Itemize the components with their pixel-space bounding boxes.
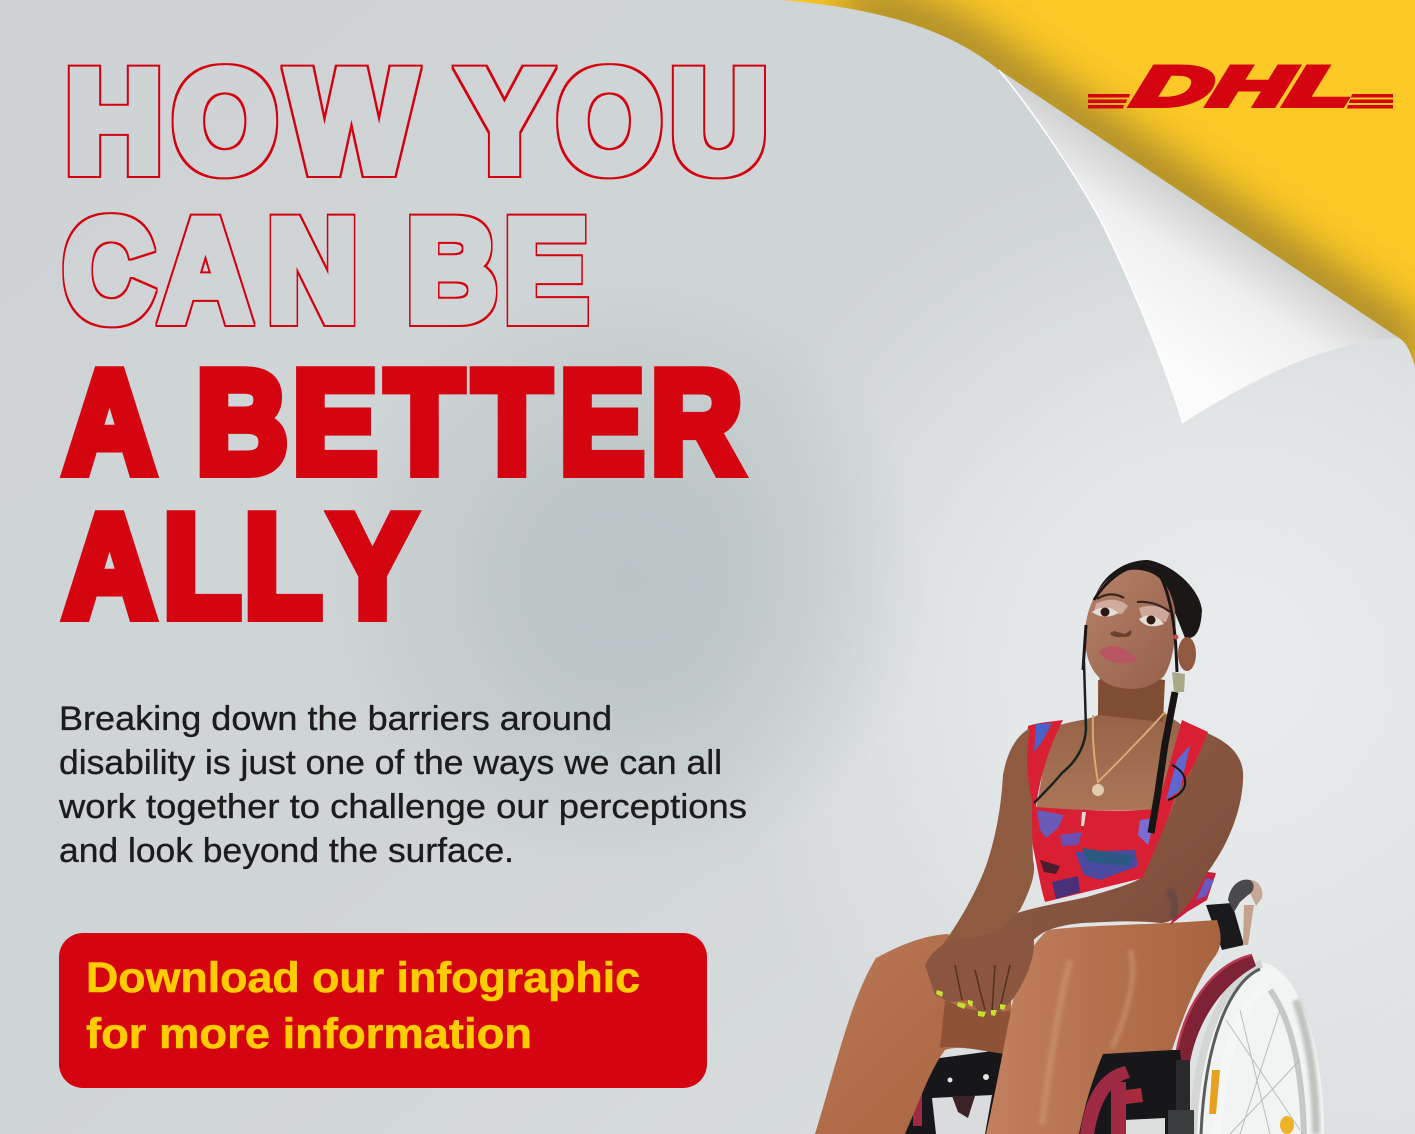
ear	[1178, 637, 1196, 671]
page curl with yellow corner	[780, 0, 1415, 423]
nose	[1110, 630, 1132, 637]
right arm	[958, 733, 1243, 990]
braids	[1083, 562, 1177, 672]
heading solid line 3: A BETTER	[64, 341, 742, 503]
folded flap	[999, 70, 1399, 423]
elbow shadow	[1168, 890, 1175, 918]
top lower right piece	[1170, 870, 1216, 925]
wheelchair	[904, 880, 1324, 1134]
hair back	[1094, 560, 1202, 638]
head	[1034, 560, 1202, 833]
shadow on yellow	[840, 3, 1415, 367]
under seat frame	[904, 1050, 1190, 1134]
necklace	[1093, 712, 1165, 782]
neck	[1098, 670, 1165, 722]
logo stripes	[1088, 94, 1393, 108]
heading outline line 2: CAN BE	[63, 191, 588, 350]
heading solid line 4: ALLY	[64, 485, 415, 647]
neck and chest skin	[1036, 680, 1190, 810]
call to action button: for more information	[86, 1010, 532, 1058]
eyes	[1092, 608, 1164, 626]
hands	[925, 925, 1034, 1017]
photo: woman in wheelchair	[815, 560, 1324, 1134]
body text: Breaking down the barriers around	[59, 700, 612, 738]
brows	[1097, 594, 1170, 612]
DHL logo	[1088, 56, 1393, 118]
body text: and look beyond the surface.	[59, 832, 514, 870]
body text: work together to challenge our perceptions	[58, 788, 747, 826]
body text	[58, 700, 747, 870]
trousers shadow	[940, 1000, 1015, 1055]
lips	[1099, 646, 1138, 663]
heading	[63, 42, 767, 647]
earring	[1172, 672, 1185, 692]
fender	[1175, 955, 1256, 1062]
face	[1085, 570, 1176, 689]
logo wordmark: DHL	[1128, 56, 1361, 118]
trousers: back leg	[815, 934, 1014, 1134]
left arm	[935, 728, 1034, 975]
call to action button	[59, 933, 707, 1088]
call to action button: Download our infographic	[86, 954, 640, 1002]
eye makeup	[1094, 600, 1128, 614]
yellow corner	[780, 0, 1415, 367]
heading outline line 1: HOW YOU	[66, 42, 767, 202]
handle and back	[1206, 903, 1244, 950]
trousers: front leg	[986, 920, 1221, 1134]
wheel	[1192, 962, 1324, 1134]
body text: disability is just one of the ways we can all	[59, 744, 722, 782]
patterned top	[1026, 720, 1208, 902]
